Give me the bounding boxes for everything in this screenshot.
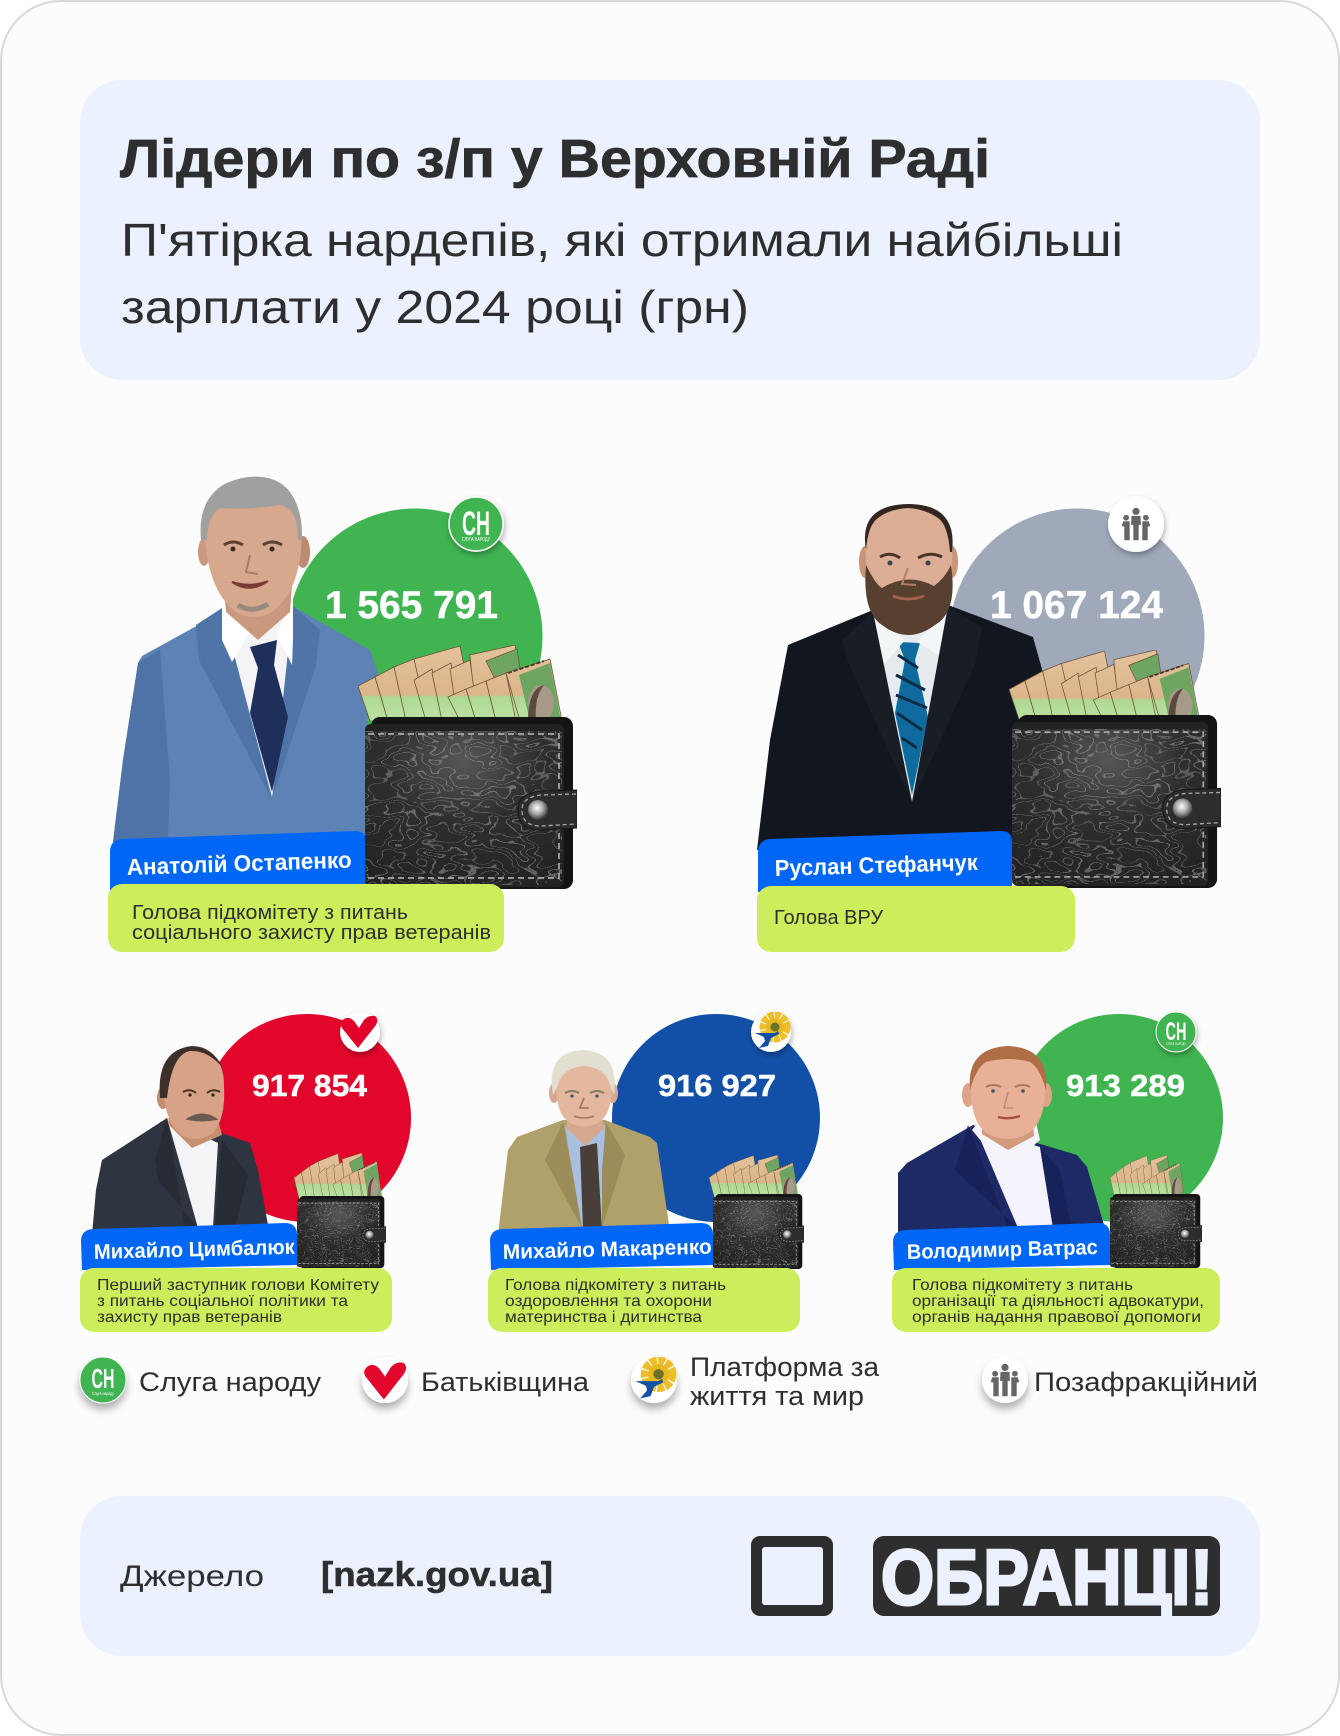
name ribbon — [490, 1223, 713, 1270]
role box: органів надання правової допомоги — [912, 1309, 1201, 1326]
wallet — [1012, 715, 1221, 888]
party badge: Sluha Narodu: СЛУГА НАРОДУ — [462, 537, 491, 543]
salary circle — [950, 508, 1204, 764]
salary circle — [612, 1014, 820, 1222]
subtitle: зарплати у 2024 році (грн) — [121, 281, 749, 333]
name ribbon — [81, 1223, 297, 1270]
name ribbon — [893, 1223, 1110, 1270]
portrait — [113, 477, 378, 842]
role box — [80, 1268, 392, 1332]
party badge: Sluha Narodu — [449, 497, 503, 551]
role box — [108, 884, 504, 952]
name ribbon: Володимир Ватрас — [907, 1236, 1098, 1264]
party badge: Batkivshchyna — [340, 1012, 380, 1052]
name ribbon: Анатолій Остапенко — [126, 847, 352, 880]
source label: Джерело — [120, 1560, 264, 1593]
logo: square — [751, 1536, 833, 1616]
role box: Перший заступник голови Комітету — [97, 1277, 379, 1294]
name ribbon: Михайло Макаренко — [503, 1236, 712, 1264]
panel: Mykhailo Tsymbaliuk — [80, 1012, 411, 1332]
party badge: Platform for Life and Peace — [751, 1012, 791, 1052]
portrait — [92, 1046, 268, 1235]
money — [294, 1153, 382, 1199]
subtitle: П'ятірка нардепів, які отримали найбільші — [121, 214, 1123, 266]
legend item: Sluha Narodu: СН — [92, 1363, 114, 1394]
party badge: Sluha Narodu: СЛУГА НАРОДУ — [1166, 1041, 1186, 1046]
panel: Volodymyr Vatras — [892, 1012, 1223, 1332]
portrait — [498, 1050, 669, 1235]
panel: footer — [80, 1496, 1260, 1656]
name ribbon — [758, 831, 1012, 892]
role box: з питань соціальної політики та — [97, 1293, 348, 1310]
money — [1009, 650, 1200, 723]
money — [1110, 1155, 1184, 1197]
party badge: Sluha Narodu: СН — [1166, 1018, 1186, 1046]
role box: захисту прав ветеранів — [97, 1309, 282, 1326]
panel: Ruslan Stefanchuk — [757, 496, 1221, 952]
wallet — [365, 717, 577, 889]
salary amount: 1 565 791 — [325, 584, 498, 627]
portrait — [757, 504, 1045, 850]
panel: header — [80, 80, 1260, 380]
subtitle — [121, 214, 1123, 333]
name ribbon: Михайло Цимбалюк — [94, 1236, 296, 1264]
source link: [nazk.gov.ua] — [321, 1556, 553, 1594]
role box: Голова ВРУ — [774, 907, 883, 929]
legend item: Platform for Life and Peace: Платформа за — [690, 1352, 880, 1382]
salary circle — [1015, 1014, 1223, 1222]
money — [358, 645, 562, 721]
role box: оздоровлення та охорони — [505, 1293, 712, 1310]
portrait — [898, 1046, 1104, 1235]
salary amount: 1 067 124 — [990, 584, 1163, 627]
wallet — [713, 1194, 804, 1269]
salary circle — [288, 508, 542, 764]
salary amount: 913 289 — [1066, 1068, 1185, 1103]
legend item: Batkivshchyna — [362, 1357, 590, 1403]
salary circle — [203, 1014, 411, 1222]
salary amount: 916 927 — [658, 1068, 776, 1103]
legend item: non-affiliated — [982, 1357, 1258, 1403]
logo: wordmark: ОБРАНЦІ! — [881, 1533, 1213, 1621]
panel: Anatolii Ostapenko — [108, 477, 577, 952]
legend item: Batkivshchyna: Батьківщина — [421, 1367, 590, 1397]
wallet — [297, 1196, 386, 1268]
legend item: Platform for Life and Peace — [631, 1352, 880, 1411]
role box: соціального захисту прав ветеранів — [132, 922, 491, 944]
title: Лідери по з/п у Верховній Раді — [120, 129, 990, 189]
party badge: Sluha Narodu: СН — [462, 505, 490, 543]
salary amount: 917 854 — [252, 1068, 368, 1103]
legend — [80, 1352, 1258, 1411]
party badge: non-affiliated — [1108, 496, 1164, 552]
panel: Mykhailo Makarenko — [488, 1012, 820, 1332]
role box: Голова підкомітету з питань — [505, 1277, 726, 1294]
role box — [892, 1268, 1220, 1332]
name ribbon — [110, 831, 366, 892]
legend item: Sluha Narodu — [80, 1357, 322, 1403]
role box — [757, 886, 1075, 952]
wallet — [1110, 1194, 1202, 1268]
party badge: Sluha Narodu — [1156, 1012, 1196, 1052]
legend item: non-affiliated: Позафракційний — [1034, 1367, 1258, 1397]
money — [709, 1155, 798, 1197]
role box — [488, 1268, 800, 1332]
role box: організації та діяльності адвокатури, — [912, 1293, 1204, 1310]
legend item: Sluha Narodu: Слуга народу — [92, 1391, 115, 1396]
name ribbon: Руслан Стефанчук — [774, 849, 979, 881]
role box: Голова підкомітету з питань — [912, 1277, 1133, 1294]
role box: материнства і дитинства — [505, 1309, 702, 1326]
legend item: Sluha Narodu: Слуга народу — [139, 1367, 322, 1397]
role box: Голова підкомітету з питань — [132, 902, 408, 924]
legend item: Platform for Life and Peace: життя та мир — [690, 1381, 864, 1411]
